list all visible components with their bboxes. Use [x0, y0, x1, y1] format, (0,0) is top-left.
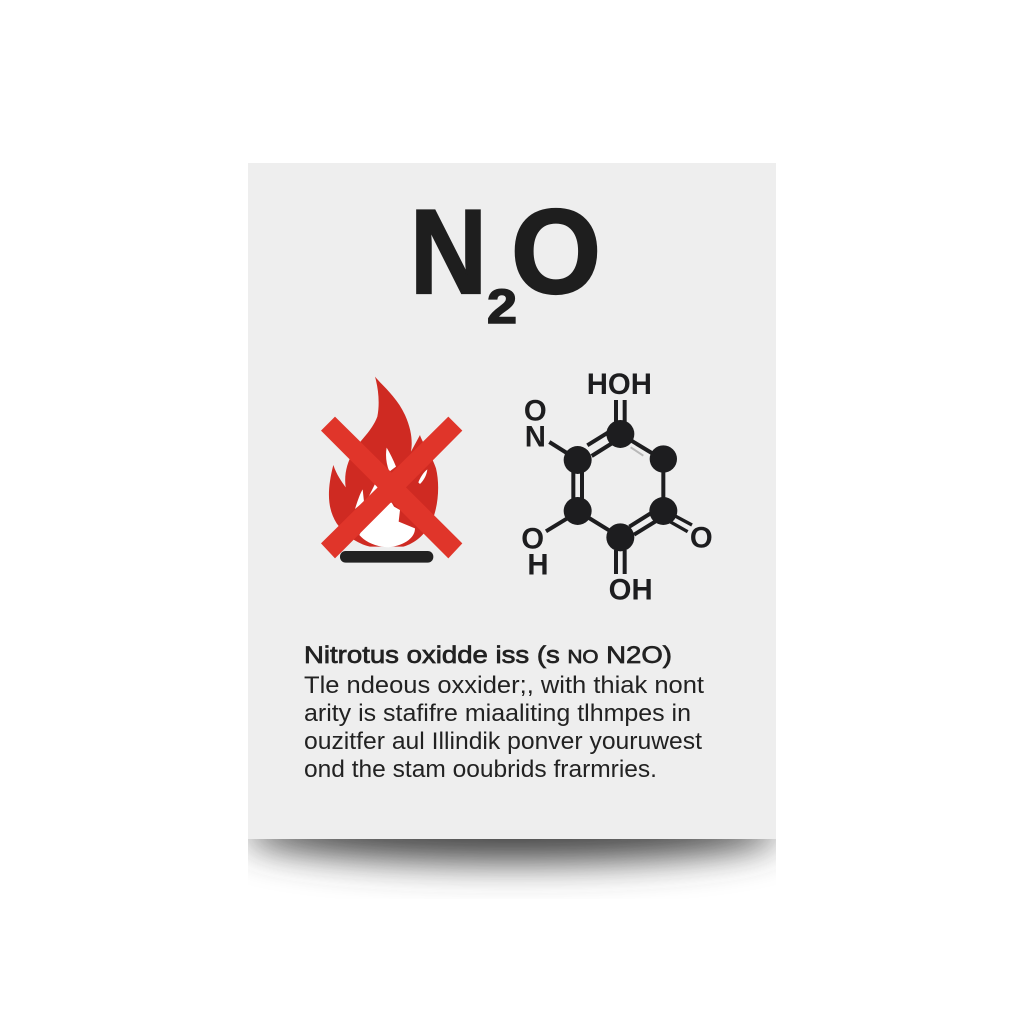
title: N2O formula: O — [511, 185, 601, 319]
base bar — [340, 551, 433, 563]
atom labels: O — [690, 522, 713, 555]
flame white core — [355, 448, 427, 547]
description heading: Nitrotus oxidde iss (s NO N2O) — [304, 642, 672, 669]
atom labels — [521, 368, 713, 606]
text block: description — [304, 642, 704, 783]
description body: ouzitfer aul Illindik ponver youruwest — [304, 728, 702, 755]
atom labels: OH — [609, 573, 653, 606]
description body: Tle ndeous oxxider;, with thiak nont — [304, 672, 704, 699]
title: N2O formula: 2 — [487, 281, 517, 334]
infographic canvas — [248, 163, 776, 893]
atom labels: HOH — [587, 368, 652, 401]
title: N2O formula — [410, 185, 601, 334]
atom labels: N — [525, 421, 546, 454]
atom labels: H — [527, 549, 549, 582]
icon: crossed-out flame — [321, 377, 462, 563]
atom labels: O — [524, 395, 547, 428]
atoms — [564, 420, 677, 551]
description body: ond the stam ooubrids frarmries. — [304, 756, 657, 783]
title: N2O formula: N — [410, 185, 487, 319]
red cross — [321, 417, 462, 558]
description body — [304, 672, 704, 783]
description body: arity is stafifre miaaliting tlhmpes in — [304, 700, 691, 727]
bonds — [546, 400, 692, 574]
panel: card — [248, 163, 776, 839]
chart: molecular structure — [521, 368, 713, 606]
card drop shadow — [248, 839, 776, 893]
flame — [329, 377, 438, 547]
atom labels: O — [521, 522, 544, 555]
